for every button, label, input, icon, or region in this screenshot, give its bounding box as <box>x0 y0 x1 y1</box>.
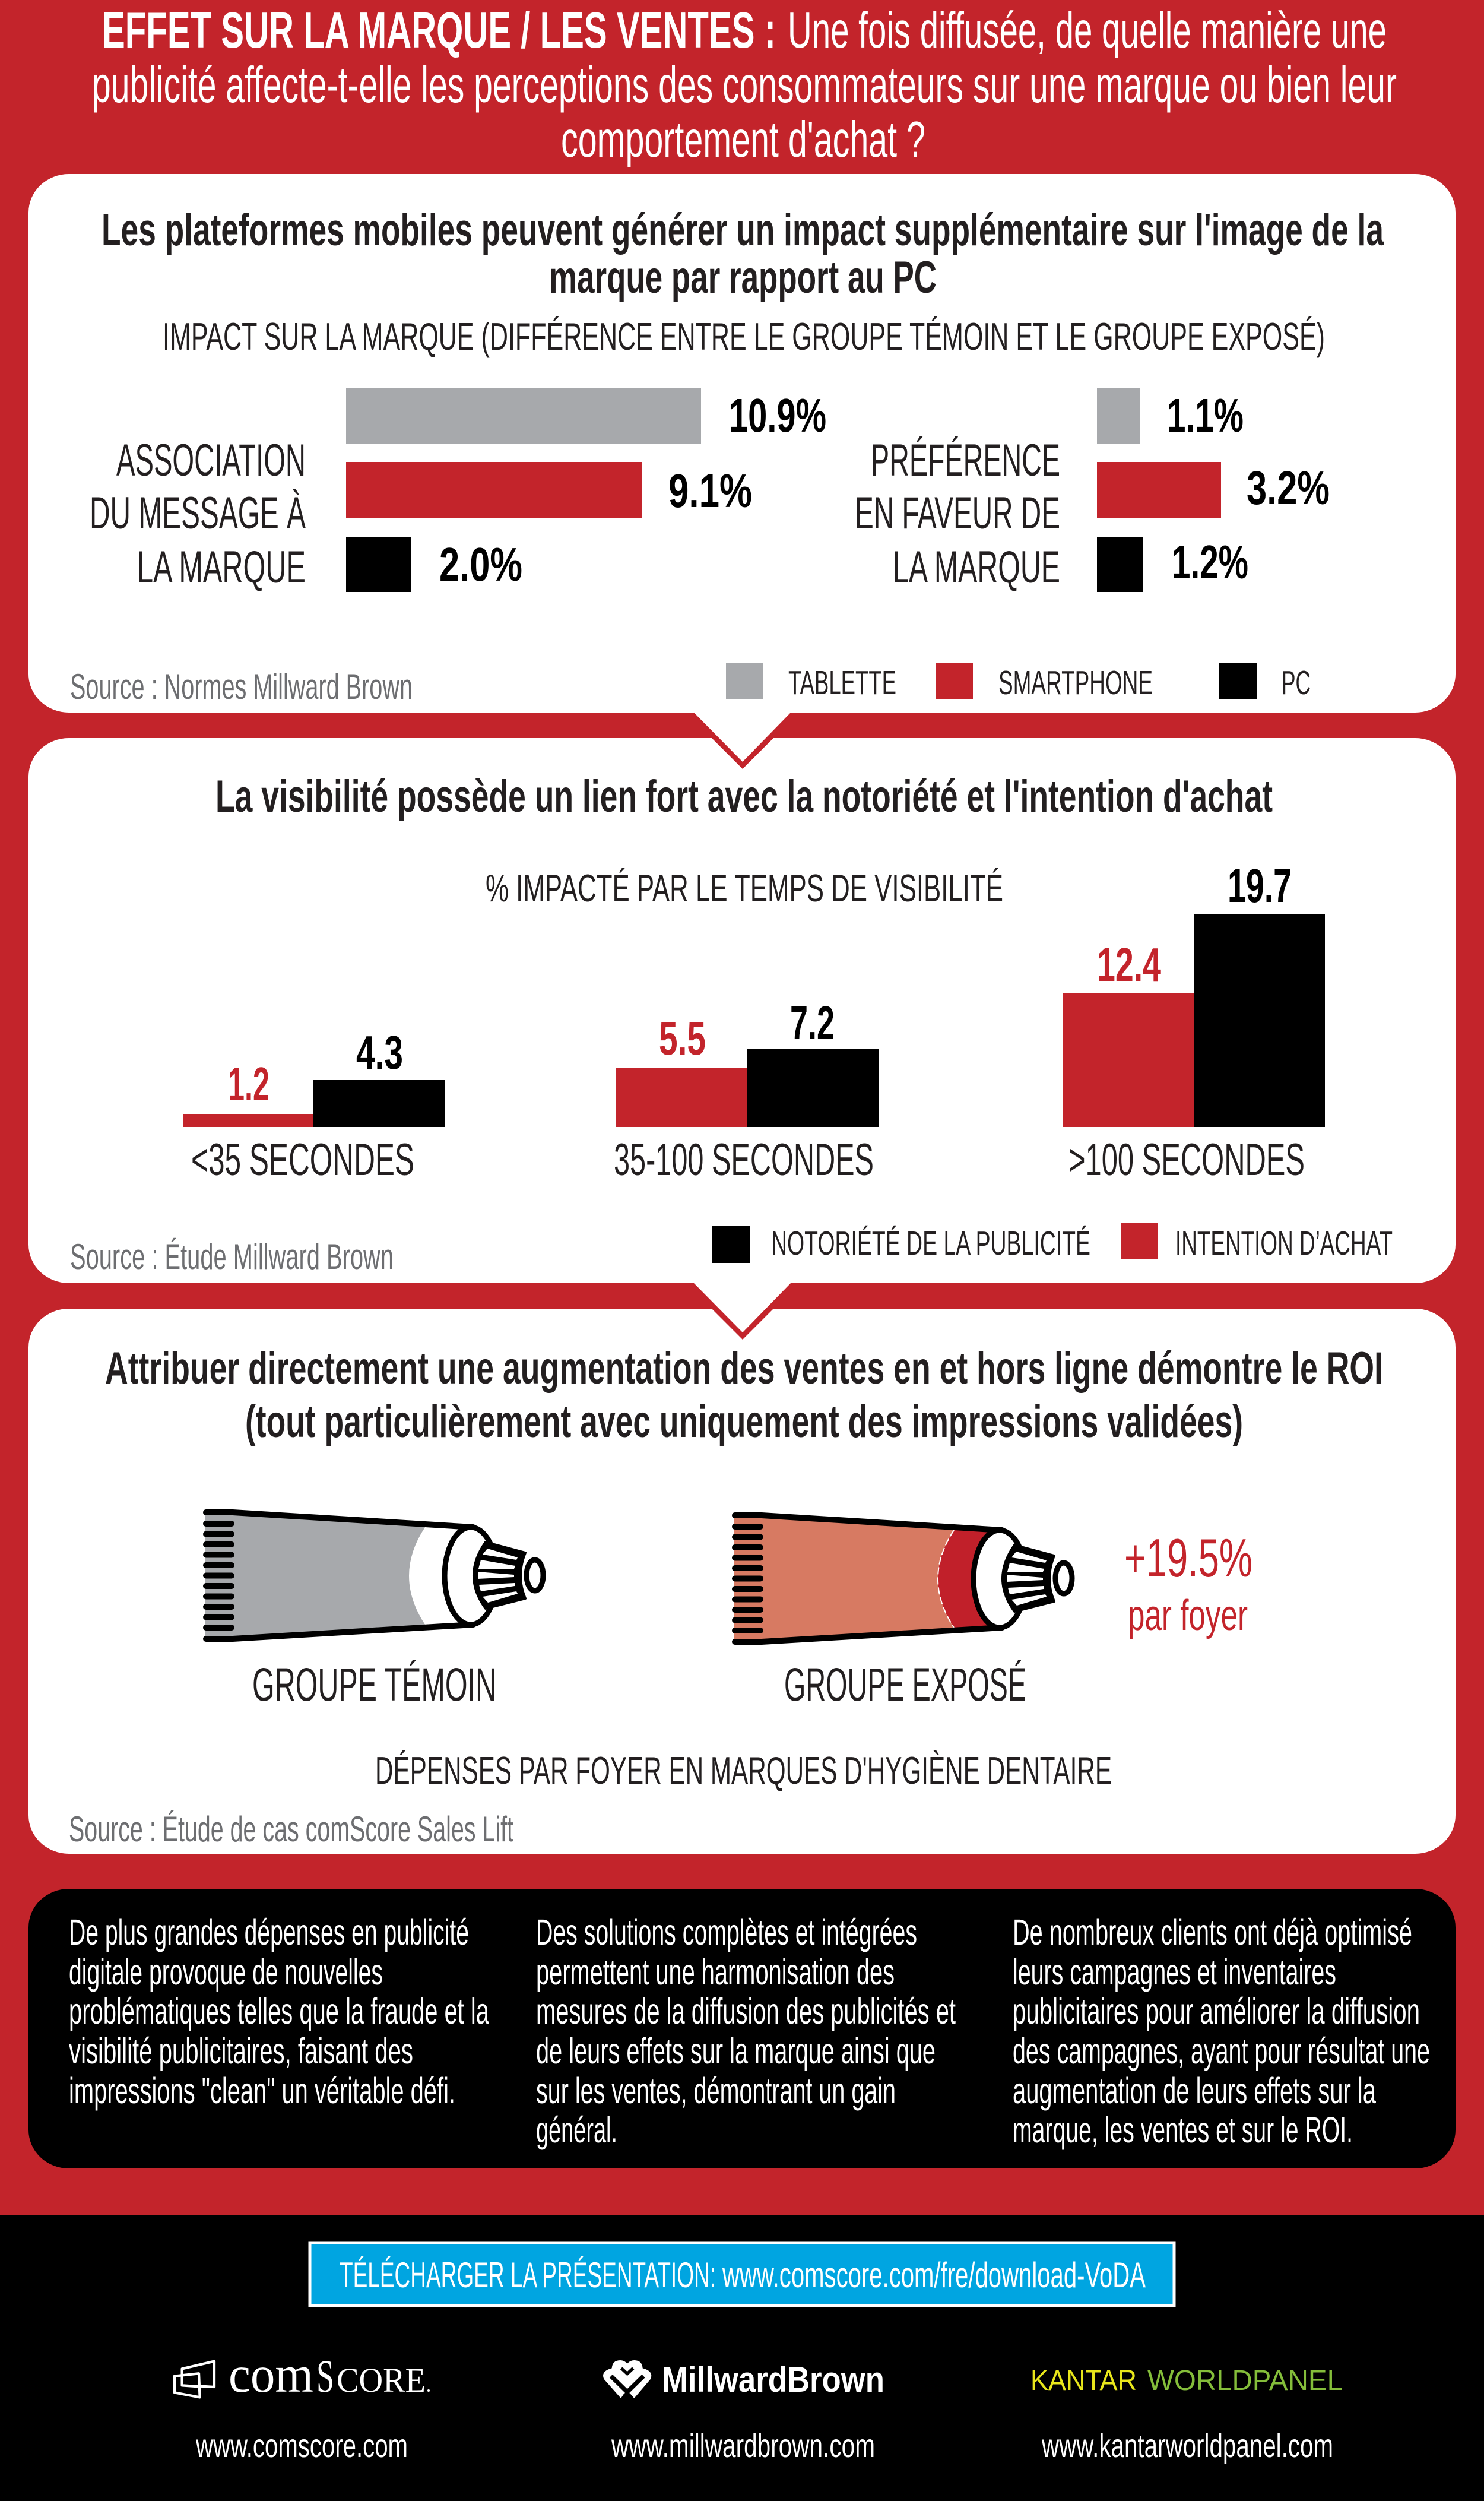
text column 1: De plus grandes dépenses en publicité <box>69 1912 469 1952</box>
bar group: over 100 seconds <box>1063 859 1325 1185</box>
download button: www.comscore.com/fre/download-VoDA <box>722 2255 1146 2295</box>
label: groupe exposé: GROUPE EXPOSÉ <box>784 1658 1026 1711</box>
callout: +19.5% par foyer: par foyer <box>1128 1592 1248 1639</box>
label: association du message <box>90 435 306 593</box>
source note: Source : Étude de cas comScore Sales Lift <box>69 1809 513 1849</box>
label: préférence <box>855 435 1060 593</box>
website links <box>195 2427 1333 2464</box>
label: préférence: LA MARQUE <box>893 542 1060 593</box>
legend <box>712 1223 1393 1263</box>
text column 2 <box>536 1912 956 2150</box>
legend: NOTORIÉTÉ DE LA PUBLICITÉ <box>771 1224 1090 1262</box>
panel: key takeaways <box>28 1889 1456 2168</box>
download button: TÉLÉCHARGER LA PRÉSENTATION: <box>340 2255 716 2295</box>
text column 2: permettent une harmonisation des <box>536 1952 895 1992</box>
logo: comScore <box>175 2345 430 2403</box>
bar group: under 35 seconds <box>183 1026 445 1185</box>
text column 2: Des solutions complètes et intégrées <box>536 1912 917 1952</box>
arrow: panel 1 to panel 2 <box>693 712 791 769</box>
source note: Source : Étude Millward Brown <box>70 1237 394 1277</box>
bar group: over 100 seconds: 12.4 <box>1097 938 1161 991</box>
callout: +19.5% par foyer: +19.5% <box>1124 1528 1252 1588</box>
source note: Source : Normes Millward Brown <box>70 667 413 707</box>
panel heading <box>102 205 1384 303</box>
bar group: under 35 seconds: 1.2 <box>228 1058 269 1110</box>
bar chart: préférence: 1.2% <box>1172 536 1248 588</box>
bar group: over 100 seconds: >100 SECONDES <box>1068 1135 1305 1185</box>
logo: comScore: com <box>229 2345 313 2403</box>
text column 1: problématiques telles que la fraude et la <box>69 1991 489 2031</box>
logo: comScore: CORE <box>337 2361 426 2399</box>
label: préférence: EN FAVEUR DE <box>855 488 1060 539</box>
text column 2: sur les ventes, démontrant un gain <box>536 2071 896 2111</box>
logo: comScore: S <box>316 2350 334 2402</box>
text column 1: visibilité publicitaires, faisant des <box>69 2031 413 2071</box>
bar chart: préférence: 3.2% <box>1247 461 1330 514</box>
logo: Kantar Worldpanel <box>1030 2365 1343 2396</box>
download button <box>310 2243 1174 2306</box>
text column 2: général. <box>536 2110 617 2150</box>
title <box>92 2 1397 168</box>
bar chart: préférence: 1.1% <box>1167 389 1244 442</box>
bar group: 35-100 seconds <box>614 996 879 1185</box>
bar chart: association du message: 10.9% <box>729 389 826 442</box>
text column 3 <box>1013 1912 1430 2150</box>
chart subtitle: % IMPACTÉ PAR LE TEMPS DE VISIBILITÉ <box>486 866 1003 910</box>
bar group: under 35 seconds: <35 SECONDES <box>191 1135 414 1185</box>
logo: Kantar Worldpanel: WORLDPANEL <box>1147 2365 1343 2396</box>
label: association du message: ASSOCIATION <box>116 435 306 486</box>
legend <box>726 663 1311 702</box>
label: association du message: LA MARQUE <box>137 542 306 593</box>
arrow: panel 2 to panel 3 <box>693 1283 791 1340</box>
title: EFFET SUR LA MARQUE / LES VENTES : <box>102 2 776 59</box>
logo: MillwardBrown: MillwardBrown <box>662 2360 884 2399</box>
bar group: 35-100 seconds: 5.5 <box>659 1012 706 1065</box>
icon: exposed group toothpaste tube <box>732 1515 1072 1642</box>
panel: visibility <box>28 738 1456 1283</box>
panel heading <box>105 1343 1383 1447</box>
label: préférence: PRÉFÉRENCE <box>871 435 1060 486</box>
bar chart: association du message <box>346 388 826 592</box>
text column 1: impressions "clean" un véritable défi. <box>69 2071 455 2111</box>
website links: www.kantarworldpanel.com <box>1041 2427 1333 2464</box>
bar group: under 35 seconds: 4.3 <box>356 1026 403 1079</box>
legend: PC <box>1282 664 1311 702</box>
bar group: over 100 seconds: 19.7 <box>1228 859 1292 912</box>
icon: control group toothpaste tube <box>203 1512 543 1639</box>
text column 2: mesures de la diffusion des publicités et <box>536 1991 956 2031</box>
bar group: 35-100 seconds: 35-100 SECONDES <box>614 1135 874 1185</box>
panel: brand impact <box>28 174 1456 713</box>
legend: TABLETTE <box>788 664 896 702</box>
logo: Kantar Worldpanel: KANTAR <box>1030 2365 1137 2396</box>
legend: SMARTPHONE <box>998 664 1153 702</box>
title: comportement d'achat ? <box>561 112 925 168</box>
panel heading: marque par rapport au PC <box>549 252 937 303</box>
bar chart: association du message: 2.0% <box>439 538 522 591</box>
website links: www.millwardbrown.com <box>611 2427 875 2464</box>
website links: www.comscore.com <box>195 2427 408 2464</box>
footer <box>0 2215 1484 2501</box>
text column 2: de leurs effets sur la marque ainsi que <box>536 2031 936 2071</box>
bar chart: préférence <box>1097 388 1330 592</box>
text column 1 <box>69 1912 489 2111</box>
label: groupe témoin: GROUPE TÉMOIN <box>252 1658 496 1711</box>
text column 1: digitale provoque de nouvelles <box>69 1952 383 1992</box>
callout: +19.5% par foyer <box>1124 1528 1252 1639</box>
bar group: 35-100 seconds: 7.2 <box>790 996 835 1049</box>
panel: sales lift <box>28 1309 1456 1854</box>
label: association du message: DU MESSAGE À <box>90 488 306 539</box>
bar chart: association du message: 9.1% <box>668 464 752 517</box>
chart caption: DÉPENSES PAR FOYER EN MARQUES D'HYGIÈNE DENTAIRE <box>375 1749 1112 1792</box>
